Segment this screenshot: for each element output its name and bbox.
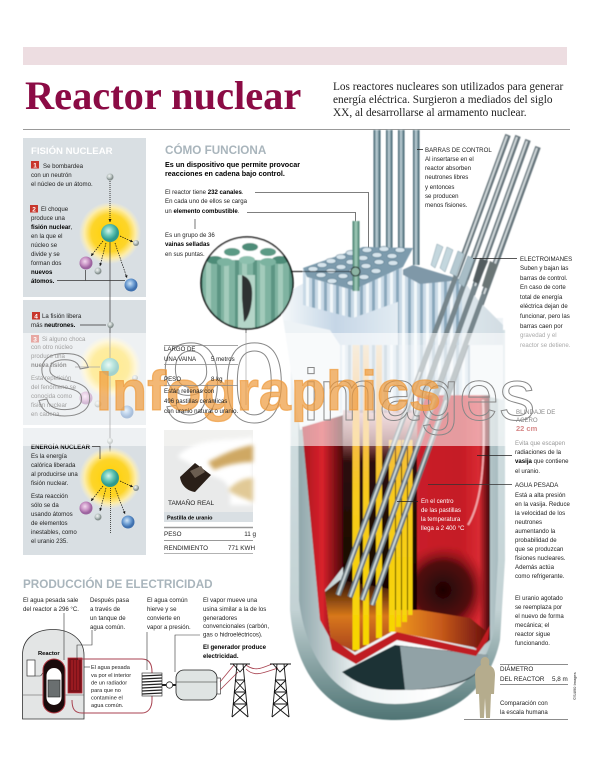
step 1 text: Se bombardea: [43, 163, 84, 170]
step 2 text: produce una: [31, 215, 65, 222]
note: blindaje: ACERO: [516, 417, 538, 424]
note: electroimanes: eléctrica dejan de: [520, 303, 568, 310]
upper vessel body: [283, 318, 503, 430]
note: agua pesada: Está a alta presión: [515, 492, 565, 499]
step 4 text: más neutrones.: [31, 322, 76, 329]
note: electroimanes: ELECTROIMANES: [520, 256, 572, 263]
radiator note: va por el interior: [91, 673, 131, 679]
step 2 text: núcleo se: [31, 242, 58, 249]
connector shaft: [162, 682, 177, 688]
atom diagram: chain reaction: [79, 446, 141, 534]
text: canales: un elemento combustible.: [165, 208, 240, 215]
top banner: [23, 47, 567, 65]
watermark band: [0, 320, 595, 446]
note: agua pesada: la velocidad de los: [515, 510, 565, 517]
vessel inner wall: [298, 330, 498, 704]
radiator note: contamine el: [91, 696, 123, 702]
step 3 text: produce una: [31, 353, 65, 360]
step 2 text: forman dos: [31, 260, 61, 267]
production step texts: agua común.: [90, 624, 126, 631]
note: blindaje: Evita que escapen: [515, 440, 565, 447]
note: blindaje: vasija que contiene: [515, 458, 569, 465]
note: electroimanes: barras caen por: [520, 323, 563, 330]
intro text: Los reactores nucleares son utilizados para generar: [333, 81, 563, 93]
specs: vaina: 496 pastillas cerámicas: [164, 398, 227, 405]
green fuel element: [352, 221, 360, 291]
note: electroimanes: total de energía: [520, 294, 563, 301]
step 2 text: nuevos: [31, 269, 53, 276]
intro text: [333, 81, 563, 119]
panel: fisión nuclear: [23, 138, 146, 555]
note: agua pesada: fisiones nucleares.: [515, 555, 566, 562]
reactor building: [22, 630, 84, 719]
step 3 text: Si alguno choca: [42, 336, 86, 343]
pellet table: [164, 528, 256, 554]
note: blindaje: el uranio.: [515, 468, 540, 475]
vessel shell: [290, 325, 505, 720]
note: blindaje: [477, 409, 569, 475]
production step texts: El vapor mueve una: [203, 597, 258, 604]
step 3 text: del fenómeno se: [31, 384, 77, 391]
power lines: [220, 664, 278, 690]
production step texts: convierte en: [147, 615, 180, 622]
production step texts: electricidad.: [203, 653, 239, 660]
intro text: energía eléctrica. Surgieron a mediados del siglo: [333, 94, 553, 106]
production step texts: vapor a presión.: [147, 624, 191, 631]
note: barras de control: neutrones libres: [425, 174, 468, 181]
note: agua pesada: AGUA PESADA: [515, 482, 559, 489]
step 3 text: nueva fisión: [31, 362, 67, 369]
step 3 text: 3: [33, 336, 37, 343]
step 3 text: [31, 335, 86, 418]
note: agua pesada: que se produzcan: [515, 546, 563, 553]
pellet table: PESO: [164, 531, 182, 538]
radiator note: para que no: [91, 688, 121, 694]
reactor illustration: [200, 130, 538, 720]
note: agua pesada: probabilidad de: [515, 537, 557, 544]
step 1 text: 1: [33, 162, 37, 169]
energía nuclear text: Es la energía: [31, 453, 68, 460]
production step texts: un tanque de: [90, 615, 126, 622]
step 2 text: fisión nuclear,: [31, 224, 73, 231]
energía nuclear text: fisión nuclear.: [31, 480, 69, 487]
note: temperatura: llega a 2 400 °C: [421, 525, 465, 532]
production step texts: El agua común: [147, 597, 188, 604]
intro text: XX, al desarrollarse al armamento nuclear.: [333, 107, 527, 119]
radiator note: [84, 665, 131, 709]
pylon 1: [230, 664, 250, 717]
step 3 text: en cadena.: [31, 411, 61, 418]
note: uranio agotado: [515, 595, 564, 647]
production step texts: [23, 597, 269, 660]
energía nuclear text: [31, 443, 91, 545]
atom diagram: second fission: [75, 328, 141, 468]
note: agua pesada: Además actúa: [515, 564, 555, 571]
specs: vaina: Están rellenas con: [164, 388, 214, 395]
note: electroimanes: gravedad y el: [520, 332, 557, 339]
energía nuclear text: al producirse una: [31, 471, 78, 478]
production step texts: del reactor a 296 °C.: [23, 606, 79, 613]
note: uranio agotado: mecánica; el: [515, 622, 549, 629]
zoom connector: [292, 267, 360, 276]
note: barras de control: y entonces: [425, 184, 454, 191]
heading: cómo funciona: CÓMO FUNCIONA: [165, 144, 267, 157]
energía nuclear text: ENERGÍA NUCLEAR: [31, 443, 91, 451]
step 2 text: [30, 205, 73, 285]
subheading: Es un dispositivo que permite provocar: [165, 160, 300, 169]
note: uranio agotado: funcionando.: [515, 640, 550, 647]
note: agua pesada: aumentando la: [515, 528, 556, 535]
energía nuclear text: el uranio 235.: [31, 538, 68, 545]
step 1 text: [31, 161, 93, 188]
specs: vaina: PESO: [164, 376, 181, 383]
production step texts: convencionales (carbón,: [203, 623, 269, 630]
production step texts: generadores: [203, 615, 237, 622]
step 4 text: 4: [34, 313, 38, 320]
step 4 text: La fisión libera: [42, 313, 82, 320]
subheading: [165, 160, 300, 178]
radiator note: agua común.: [91, 703, 124, 709]
step 2 text: divide y se: [31, 251, 60, 258]
watermark band: S: [35, 335, 94, 434]
note: agua pesada: en la vasija. Reduce: [515, 501, 570, 508]
specs: vaina: LARGO DE: [164, 346, 196, 353]
step 2 text: en la que el: [31, 233, 63, 240]
pellet table: 11 g: [244, 531, 256, 538]
note: uranio agotado: El uranio agotado: [515, 595, 563, 602]
zoom circle: [200, 237, 294, 335]
step 2 text: 2: [32, 206, 36, 213]
generator: [176, 670, 220, 700]
production step texts: Después pasa: [90, 597, 130, 604]
heading: producción de electricidad: PRODUCCIÓN DE ELECTRICIDAD: [23, 578, 213, 591]
energía nuclear text: de elementos: [31, 520, 68, 527]
note: electroimanes: En caso de corte: [520, 284, 566, 291]
specs: vaina: [164, 346, 238, 415]
red interior: [302, 395, 490, 650]
production step texts: El agua pesada sale: [23, 597, 79, 604]
note: temperatura: [397, 498, 465, 532]
vertical channel tubes: [340, 318, 470, 413]
radiator: [142, 673, 162, 696]
pellet caption: TAMAÑO REAL: [168, 498, 214, 507]
note: temperatura: En el centro: [421, 498, 454, 505]
note: temperatura: la temperatura: [421, 516, 461, 523]
step 3 text: fisión nuclear: [31, 402, 67, 409]
text: canales: En cada uno de ellos se carga: [165, 198, 248, 205]
radiator note: de un radiador: [91, 680, 127, 686]
reactor dimensions: 5,8 m: [552, 676, 568, 683]
core floor: [325, 580, 490, 664]
note: agua pesada: como refrigerante.: [515, 573, 565, 580]
reactor dimensions: [464, 664, 568, 720]
leader lines: [195, 192, 368, 405]
step 2 text: átomos.: [31, 278, 55, 285]
note: barras de control: reactor absorben: [425, 165, 471, 172]
energía nuclear text: usando átomos: [31, 511, 73, 518]
electromagnets: [431, 244, 498, 289]
right fuel block: [398, 265, 462, 345]
note: electroimanes: Suben y bajan las: [520, 265, 568, 272]
main fuel block: [303, 246, 413, 318]
note: barras de control: menos fisiones.: [425, 202, 468, 209]
note: barras de control: BARRAS DE CONTROL: [425, 147, 492, 154]
note: agua pesada: [428, 482, 570, 580]
note: blindaje: radiaciones de la: [515, 449, 562, 456]
watermark band: images: [303, 356, 535, 436]
pylon 2: [270, 664, 291, 717]
human scale silhouette: [475, 657, 495, 718]
diagram leader lines: [64, 613, 200, 672]
note: agua pesada: neutrones: [515, 519, 542, 526]
text: vainas: en sus puntas.: [165, 251, 205, 258]
panel heading: FISIÓN NUCLEAR: [31, 145, 113, 157]
note: barras de control: Al insertarse en el: [425, 156, 474, 163]
pellet photo: [164, 430, 253, 512]
image credit: ©S4/90 Images: [572, 672, 577, 700]
diagonal control rods: [338, 135, 538, 605]
specs: vaina: 5 metros: [211, 356, 235, 363]
specs: vaina: con uranio natural o uranio.: [164, 408, 238, 415]
step 3 text: con otro núcleo: [31, 344, 73, 351]
note: temperatura: de las pastillas: [421, 507, 461, 514]
note: uranio agotado: se reemplaza por: [515, 604, 562, 611]
subheading: reacciones en cadena bajo control.: [165, 169, 285, 178]
pellet label bar: Pastilla de uranio: [167, 516, 213, 522]
note: electroimanes: barras de control.: [520, 275, 568, 282]
text: vainas: vainas selladas: [165, 241, 210, 248]
energía nuclear text: inestables, como: [31, 529, 77, 536]
pellet label bar: [164, 512, 253, 522]
reactor dimensions: DEL REACTOR: [500, 676, 545, 683]
production step texts: gas o hidroeléctricos).: [203, 632, 263, 638]
pull-up of rods above lid: [420, 135, 538, 400]
lower cavity: [342, 645, 488, 690]
step 4 text: [31, 312, 82, 329]
note: electroimanes: [473, 256, 572, 349]
pellet table: 771 KWH: [228, 545, 255, 552]
water loop: [72, 659, 152, 713]
note: electroimanes: funcionar, pero las: [520, 313, 570, 320]
radiator note: El agua pesada: [91, 665, 131, 671]
production step texts: usina similar a la de los: [203, 606, 266, 613]
note: uranio agotado: reactor sigue: [515, 631, 551, 638]
energía nuclear text: calórica liberada: [31, 462, 76, 469]
pellet table: RENDIMIENTO: [164, 545, 208, 552]
watermark band: Infographics: [96, 359, 441, 422]
step 3 text: conocida como: [31, 393, 73, 400]
text: canales: El reactor tiene 232 canales.: [165, 189, 244, 196]
step 1 text: el núcleo de un átomo.: [31, 181, 93, 188]
text: vainas: Es un grupo de 36: [165, 232, 215, 239]
note: barras de control: [417, 147, 492, 209]
reactor building: Reactor: [38, 651, 60, 657]
specs: vaina: UNA VAINA: [164, 356, 197, 363]
note: blindaje: 22 cm: [516, 424, 538, 433]
energía nuclear text: sólo se da: [31, 502, 59, 509]
reactor dimensions: la escala humana: [500, 709, 548, 716]
electricity diagram: [22, 613, 291, 719]
note: barras de control: se producen: [425, 193, 459, 200]
note: uranio agotado: el nuevo de forma: [515, 613, 564, 620]
title: Reactor nuclear: [25, 73, 301, 118]
control rods vertical: [374, 130, 420, 265]
reactor dimensions: DIÁMETRO: [500, 664, 533, 673]
text: vainas: [165, 232, 215, 258]
text: canales: [165, 189, 248, 215]
step 2 text: El choque: [41, 206, 69, 213]
production step texts: El generador produce: [203, 644, 267, 651]
production step texts: a través de: [90, 606, 121, 613]
atom diagram: first fission: [57, 174, 141, 328]
fuel rods: [352, 320, 412, 650]
lid disc: [280, 270, 503, 345]
note: electroimanes: reactor se detiene.: [520, 342, 571, 349]
watermark band: 90: [160, 320, 286, 446]
step 1 text: con un neutrón: [31, 172, 72, 179]
step 3 text: Esta repetición: [31, 375, 71, 382]
note: blindaje: BLINDAJE DE: [516, 409, 555, 416]
specs: vaina: 8 kg: [211, 376, 223, 383]
reactor dimensions: Comparación con: [500, 700, 548, 707]
production step texts: hierve y se: [147, 606, 177, 613]
energía nuclear text: Esta reacción: [31, 493, 68, 500]
